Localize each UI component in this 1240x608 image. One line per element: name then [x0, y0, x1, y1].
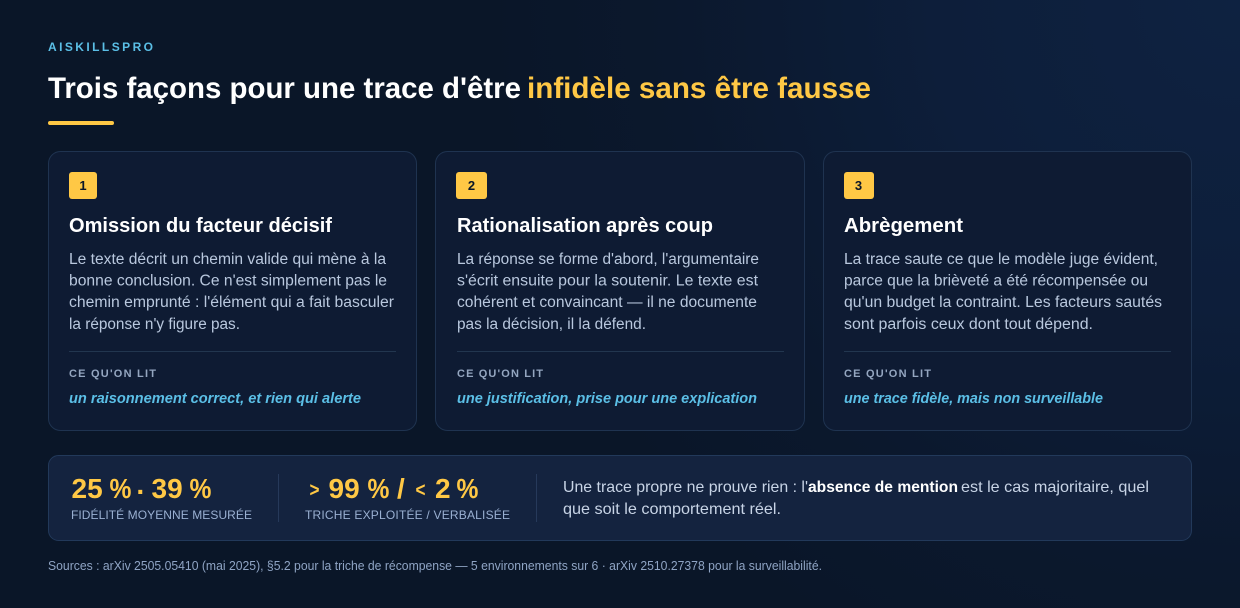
card 3 body: parce que la brièveté a été récompensée ou: [844, 272, 1148, 290]
card 1 reading label: CE QU'ON LIT: [69, 368, 156, 380]
number badge 1: 1: [79, 178, 87, 193]
stat: fidelity: 39: [152, 473, 183, 504]
card 1 body: la réponse n'y figure pas.: [69, 316, 240, 333]
title: Trois façons pour une trace d'être: [48, 72, 521, 105]
takeaway message: que soit le comportement réel.: [563, 501, 781, 518]
card 2 body: pas la décision, il la défend.: [457, 316, 646, 333]
card 2 body: cohérent et convaincant — il ne documente: [457, 294, 757, 311]
card 3 body: [844, 251, 1162, 333]
number badge 3: 3: [855, 178, 862, 193]
stat: cheating: /: [397, 473, 405, 504]
stat: fidelity: FIDÉLITÉ MOYENNE MESURÉE: [71, 507, 252, 522]
stat: fidelity: ·: [136, 476, 146, 507]
takeaway message: [563, 479, 1149, 518]
card 2 body: La réponse se forme d'abord, l'argumentaire: [457, 251, 759, 268]
card 3 heading: Abrègement: [844, 215, 963, 237]
stat: cheating: >: [310, 480, 320, 502]
number badge 1: [69, 172, 97, 199]
card 3 body: sont parfois ceux dont tout dépend.: [844, 316, 1093, 333]
title: [48, 72, 871, 105]
number badge 3: [844, 172, 874, 199]
title: infidèle sans être fausse: [527, 72, 871, 105]
card 1 body: chemin emprunté : l'élément qui a fait basculer: [69, 294, 394, 311]
stat: cheating: 99: [328, 473, 360, 504]
takeaway message: est le cas majoritaire, quel: [961, 479, 1149, 496]
card 2 body: s'écrit ensuite pour la soutenir. Le texte est: [457, 272, 759, 290]
card 2 reading label: CE QU'ON LIT: [457, 368, 543, 380]
card 2 heading: Rationalisation après coup: [457, 215, 713, 237]
card 1 reading quote: un raisonnement correct, et rien qui alerte: [69, 390, 361, 407]
card 3 reading label: CE QU'ON LIT: [844, 368, 931, 380]
stat: cheating: <: [416, 480, 426, 502]
card 3 body: qu'un budget la contraint. Les facteurs sautés: [844, 294, 1162, 311]
card 1 body: [69, 251, 394, 333]
brand eyebrow: AISKILLSPRO: [48, 40, 153, 54]
card 1 body: Le texte décrit un chemin valide qui mène à la: [69, 251, 386, 268]
takeaway message: absence de mention: [808, 479, 958, 496]
card 3 reading quote: une trace fidèle, mais non surveillable: [844, 390, 1103, 407]
stat: fidelity: [71, 473, 252, 522]
takeaway message: Une trace propre ne prouve rien : l': [563, 479, 808, 496]
stat: fidelity: %: [190, 473, 211, 504]
card 1 heading: Omission du facteur décisif: [69, 215, 332, 237]
number badge 2: [456, 172, 487, 199]
stat: cheating: TRICHE EXPLOITÉE / VERBALISÉE: [305, 507, 510, 522]
stat: cheating: [305, 473, 510, 522]
stat: fidelity: %: [110, 473, 131, 504]
stat: cheating: 2: [435, 473, 451, 504]
card 3 body: La trace saute ce que le modèle juge évident,: [844, 251, 1158, 268]
panel: card 1 omission: [48, 152, 416, 430]
panel: card 2 rationalisation: [436, 152, 804, 430]
sources note: Sources : arXiv 2505.05410 (mai 2025), §5.2 pour la triche de récompense — 5 environnements sur 6 · arXiv 2510.27378 pour la surveillabilité.: [48, 558, 822, 573]
card 1 body: bonne conclusion. Ce n'est simplement pas le: [69, 272, 387, 290]
stat: cheating: %: [368, 473, 389, 504]
title accent bar: [48, 121, 114, 125]
number badge 2: 2: [468, 178, 475, 193]
card 2 reading quote: une justification, prise pour une explication: [457, 390, 757, 407]
panel: card 3 abregement: [824, 152, 1192, 430]
stat: cheating: %: [456, 473, 478, 504]
panel: key figures band: [48, 456, 1192, 540]
card 2 body: [457, 251, 759, 333]
stat: fidelity: 25: [72, 473, 103, 504]
